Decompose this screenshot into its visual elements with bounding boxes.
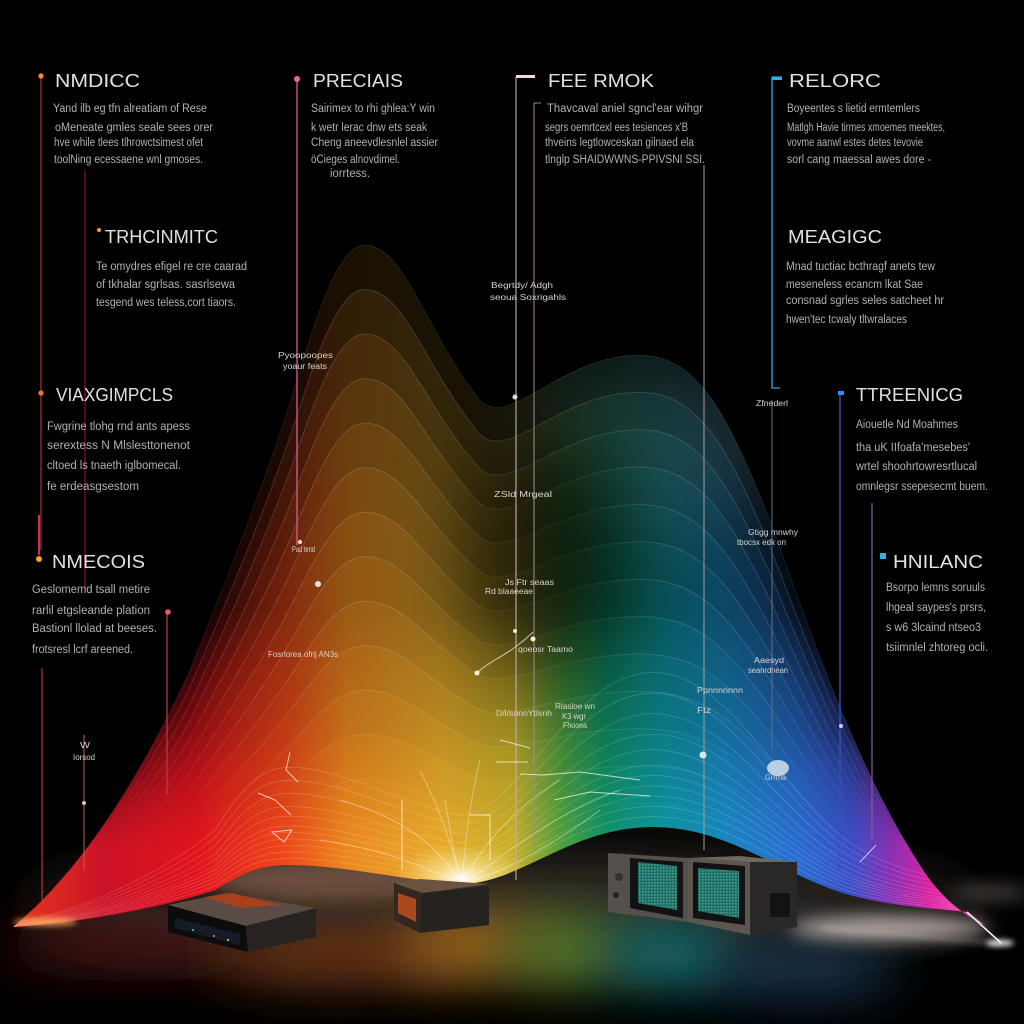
headings and descriptions: left column: cltoed ls tnaeth iglbomecal. xyxy=(47,460,181,472)
small chart annotations: yoaur feats xyxy=(283,362,327,371)
small chart annotations: ZSld Mrgeal xyxy=(494,490,552,499)
small chart annotations: Js Ftr seaas xyxy=(505,578,554,587)
data scribbles xyxy=(258,632,876,870)
headings and descriptions: center columns: thveins legtlowceskan gilnaed ela xyxy=(545,137,695,149)
headings and descriptions: left column: rarlil etgsleande plation xyxy=(32,605,150,617)
headings and descriptions: center columns: FEE RMOK xyxy=(548,71,654,91)
small chart annotations: Rlasloe wn xyxy=(555,702,595,711)
small chart annotations: seanrdnean xyxy=(748,666,788,675)
device: twin monitors xyxy=(608,853,797,935)
headings and descriptions: center columns xyxy=(311,71,705,180)
headings and descriptions: left column: tesgend wes teless,cort tiaors. xyxy=(96,297,236,309)
headings and descriptions: right column: MEAGIGC xyxy=(788,227,882,247)
marker dots xyxy=(36,73,886,805)
headings and descriptions: right column: vovme aanwl estes detes tevovie xyxy=(787,137,923,149)
headings and descriptions: right column: Mnad tuctiac bcthragf anets tew xyxy=(786,261,936,273)
small chart annotations: tbocsx edk on xyxy=(737,538,786,547)
headings and descriptions: left column: oMeneate gmles seale sees orer xyxy=(55,122,213,134)
headings and descriptions: right column: HNILANC xyxy=(893,552,983,572)
vertical leader lines and markers xyxy=(39,76,872,900)
red tip glow xyxy=(13,918,77,926)
device: small box xyxy=(394,879,489,933)
headings and descriptions: center columns: Sairimex to rhi ghlea:Y win xyxy=(311,103,435,115)
small chart annotations: qoeosr Taamo xyxy=(518,645,574,654)
headings and descriptions: right column: Bsorpo lemns soruuls xyxy=(886,582,985,594)
small chart annotations: Zfnederl xyxy=(756,399,788,408)
headings and descriptions: right column: s w6 3lcaind ntseo3 xyxy=(886,622,981,634)
headings and descriptions: right column: consnad sgrles seles satcheet hr xyxy=(786,295,944,307)
small chart annotations: D/l/sonoYtlsnh xyxy=(496,709,552,718)
central dark valley xyxy=(465,430,625,690)
headings and descriptions: right column: Matlgh Havie tirmes xmoemes meektes, xyxy=(787,122,945,134)
headings and descriptions: left column: fe erdeasgsestom xyxy=(47,481,139,493)
headings and descriptions: left column: TRHCINMITC xyxy=(105,227,218,247)
small chart annotations: Rd blaaeeae xyxy=(485,587,534,596)
small chart annotations: Aaesyd xyxy=(754,656,784,665)
headings and descriptions: left column: NMDICC xyxy=(55,71,140,91)
small chart annotations: Iorsod xyxy=(73,753,95,762)
headings and descriptions: center columns: segrs oemrtcexl ees tesiences x'B xyxy=(545,122,688,134)
headings and descriptions: left column: hve while tlees tlhrowctsimest ofet xyxy=(54,137,204,149)
small chart annotations: Grrma xyxy=(765,773,787,782)
headings and descriptions: left column: toolNing ecessaene wnl gmoses. xyxy=(54,154,203,166)
central light burst xyxy=(320,760,620,883)
headings and descriptions: right column: wrtel shoohrtowresrtlucal xyxy=(855,461,977,473)
fine spectrum lines xyxy=(13,672,967,927)
floor with colored reflections xyxy=(0,850,1024,994)
headings and descriptions: left column: serextess N Mlslesttonenot xyxy=(47,440,191,452)
small chart annotations: Ftz xyxy=(697,706,711,715)
headings and descriptions: center columns: tlnglp SHAIDWWNS-PPIVSNI SSI. xyxy=(545,154,705,166)
headings and descriptions: right column: Aiouetle Nd Moahmes xyxy=(856,419,958,431)
headings and descriptions: center columns: Cheng aneevdlesnlel assier xyxy=(311,137,438,149)
small chart annotations: W xyxy=(80,741,91,750)
headings and descriptions: center columns: Thavcaval aniel sgncl'ear wihgr xyxy=(547,103,703,115)
headings and descriptions: center columns: iorrtess. xyxy=(330,168,370,180)
light ray at right tip xyxy=(820,912,1014,946)
headings and descriptions: left column: Geslomemd tsall metire xyxy=(32,584,150,596)
headings and descriptions: left column: Fwgrine tlohg rnd ants apess xyxy=(47,421,190,433)
headings and descriptions: right column: meseneless ecancm lkat Sae xyxy=(786,279,923,291)
small chart annotations: Fhooea xyxy=(563,721,587,730)
small chart annotations: Begrtdy/ Adgh xyxy=(491,281,553,290)
headings and descriptions: left column: Yand ilb eg tfn alreatiam of Rese xyxy=(53,103,207,115)
device: small console xyxy=(168,893,316,952)
headings and descriptions: right column: omnlegsr ssepesecmt buem. xyxy=(856,481,988,493)
headings and descriptions: right column: hwen'tec tcwaly tltwralaces xyxy=(786,314,907,326)
headings and descriptions: right column xyxy=(786,71,988,654)
headings and descriptions: right column: lhgeal saypes's prsrs, xyxy=(886,602,986,614)
headings and descriptions: left column: of tkhalar sgrlsas. sasrlsewa xyxy=(96,279,236,291)
small chart annotations: Pyoopoopes xyxy=(278,351,333,360)
small chart annotations xyxy=(73,281,798,782)
headings and descriptions: right column: TTREENICG xyxy=(856,385,963,405)
small chart annotations: K3 wgr xyxy=(562,712,586,721)
headings and descriptions: left column: Te omydres efigel re cre caarad xyxy=(96,261,247,273)
spectrum wave layers xyxy=(13,245,985,927)
headings and descriptions: left column: frotsresl lcrf areened. xyxy=(32,644,133,656)
headings and descriptions: left column: VIAXGIMPCLS xyxy=(56,385,173,405)
headings and descriptions: right column: tsiimnlel zhtoreg ocli. xyxy=(886,642,988,654)
headings and descriptions: left column: Bastionl llolad at beeses. xyxy=(32,623,157,635)
headings and descriptions: right column: sorl cang maessal awes dore - xyxy=(787,154,931,166)
grey wash on right hump xyxy=(530,360,770,540)
headings and descriptions: right column: tha uK IIfoafa'mesebes' xyxy=(856,442,970,454)
small chart annotations: Pad tend xyxy=(292,545,315,554)
small chart annotations: seoua Soxrigahls xyxy=(490,293,566,302)
headings and descriptions: center columns: öCieges alnovdimel. xyxy=(311,154,400,166)
headings and descriptions: center columns: PRECIAIS xyxy=(313,71,403,91)
small chart annotations: Gtigg mnwhy xyxy=(748,528,798,537)
headings and descriptions: right column: RELORC xyxy=(789,71,881,91)
small chart annotations: Fosrlorea ofrlj AN3s xyxy=(268,650,338,659)
headings and descriptions: left column xyxy=(32,71,247,656)
small chart annotations: Ppnnnnnnn xyxy=(697,686,743,695)
headings and descriptions: center columns: k wetr lerac dnw ets seak xyxy=(311,122,427,134)
headings and descriptions: right column: Boyeentes s lietid ermtemlers xyxy=(787,103,920,115)
headings and descriptions: left column: NMECOIS xyxy=(52,552,145,572)
